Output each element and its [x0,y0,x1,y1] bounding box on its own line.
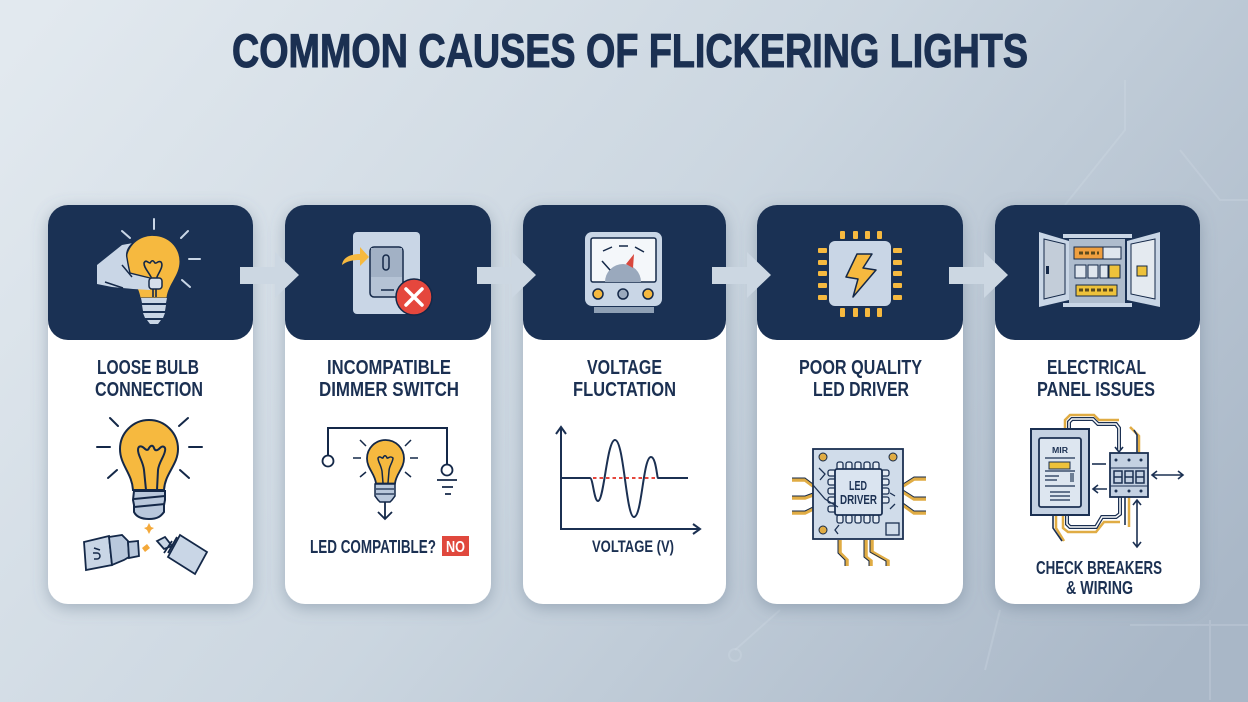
illustration: bulb and loose socket [84,418,207,574]
badge: NO: NO [446,539,465,556]
header band: loose bulb [48,205,253,340]
diagram: dimmer circuit with bulb [322,428,457,519]
arrow: step 1 to 2 [240,252,299,298]
illustration: LED driver board [792,449,926,566]
panel: electrical panel issues [995,205,1200,604]
arrow: step 2 to 3 [477,252,536,298]
panel: poor quality LED driver [757,205,963,604]
heading: incompatible dimmer switch [319,357,459,401]
icon: hand holding bulb [97,219,200,324]
icon: open electrical panel [1039,232,1160,307]
icon: voltmeter [585,232,662,313]
heading: voltage fluctation: FLUCTATION [573,379,676,401]
diagram: breakers and wiring [1031,415,1183,547]
caption: check breakers and wiring [1036,558,1162,598]
heading: electrical panel issues: PANEL ISSUES [1037,379,1155,401]
chart: voltage waveform [556,427,700,534]
heading: incompatible dimmer switch: INCOMPATIBLE [327,357,451,379]
heading: electrical panel issues [1037,357,1155,401]
panel: incompatible dimmer switch [285,205,491,604]
icon: chip with lightning bolt [818,231,902,317]
heading: electrical panel issues: ELECTRICAL [1047,357,1146,379]
heading: incompatible dimmer switch: DIMMER SWITCH [319,379,459,401]
heading: poor quality LED driver: POOR QUALITY [799,357,923,379]
heading: voltage fluctation [573,357,676,401]
heading: loose bulb connection: LOOSE BULB [97,357,199,379]
heading: voltage fluctation: VOLTAGE [587,357,662,379]
heading: loose bulb connection: CONNECTION [95,379,203,401]
header band: LED driver [757,205,963,340]
arrow: step 3 to 4 [712,252,771,298]
panel: voltage fluctuation [523,205,726,604]
heading: loose bulb connection [95,357,203,401]
label: voltage axis: VOLTAGE (V) [592,537,674,556]
panel: loose bulb connection [48,205,253,604]
heading: poor quality LED driver: LED DRIVER [813,379,909,401]
label: LED compatible: LED COMPATIBLE? [310,537,436,557]
heading: poor quality LED driver [799,357,923,401]
header band: voltage [523,205,726,340]
icon: dimmer switch with red cross [342,232,432,315]
arrow: step 4 to 5 [949,252,1008,298]
header band: dimmer [285,205,491,340]
caption: check breakers and wiring: CHECK BREAKERS [1036,558,1162,578]
caption: check breakers and wiring: & WIRING [1066,578,1133,598]
header band: electrical panel [995,205,1200,340]
illustration: LED driver board: LED [849,478,867,493]
diagram: breakers and wiring: MIR [1052,446,1068,455]
illustration: LED driver board: DRIVER [840,492,877,507]
title: COMMON CAUSES OF FLICKERING LIGHTS [232,24,1028,77]
